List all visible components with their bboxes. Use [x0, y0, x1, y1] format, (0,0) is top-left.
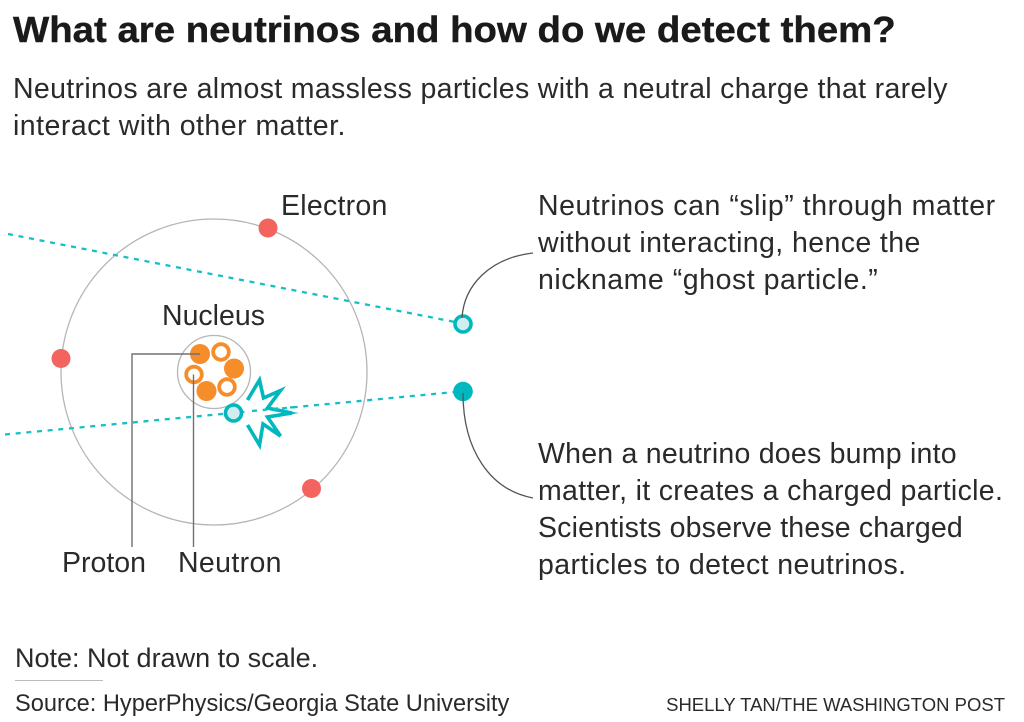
credit: SHELLY TAN/THE WASHINGTON POST [666, 694, 1005, 715]
callout: detection: particles to detect neutrinos. [538, 549, 906, 581]
neutrino at collision [226, 405, 242, 421]
callout: detection: When a neutrino does bump into [538, 438, 957, 470]
callout: ghost particle: Neutrinos can “slip” through matter [538, 190, 996, 222]
charged particle marker [453, 382, 473, 401]
footer rule [15, 680, 103, 682]
subtitle: Neutrinos are almost massless particles with a neutral charge that rarely [13, 73, 948, 105]
nucleus boundary [178, 336, 250, 408]
label: neutron: Neutron [178, 547, 282, 579]
electron orbit [61, 219, 367, 525]
source: Source: HyperPhysics/Georgia State University [15, 691, 509, 717]
subtitle [13, 73, 948, 142]
label: proton: Proton [62, 547, 146, 579]
callout: ghost particle: without interacting, hence the [538, 227, 921, 259]
burst dashed line continuation [252, 408, 283, 411]
top callout connector [462, 253, 533, 318]
label: electron: Electron [281, 190, 388, 222]
electrons [52, 218, 321, 498]
neutron leader line [192, 374, 194, 547]
neutrino path: passing through [8, 234, 455, 322]
collision burst icon [248, 380, 299, 445]
burst dashed line exit [290, 406, 300, 408]
callout: ghost particle: nickname “ghost particle.” [538, 264, 878, 296]
subtitle: interact with other matter. [13, 110, 346, 142]
callout: detection [538, 438, 1003, 581]
neutrino path: interacting [5, 392, 455, 434]
protons [190, 344, 244, 401]
callout: detection: matter, it creates a charged particle. [538, 475, 1003, 507]
label: nucleus: Nucleus [162, 300, 265, 332]
proton leader line [132, 354, 200, 547]
bottom callout connector [463, 393, 533, 498]
note: Note: Not drawn to scale. [15, 643, 318, 673]
title: What are neutrinos and how do we detect them? [13, 9, 896, 50]
callout: ghost particle [538, 190, 996, 296]
neutrons [186, 344, 235, 395]
ghost neutrino marker [455, 316, 471, 332]
callout: detection: Scientists observe these charged [538, 512, 963, 544]
